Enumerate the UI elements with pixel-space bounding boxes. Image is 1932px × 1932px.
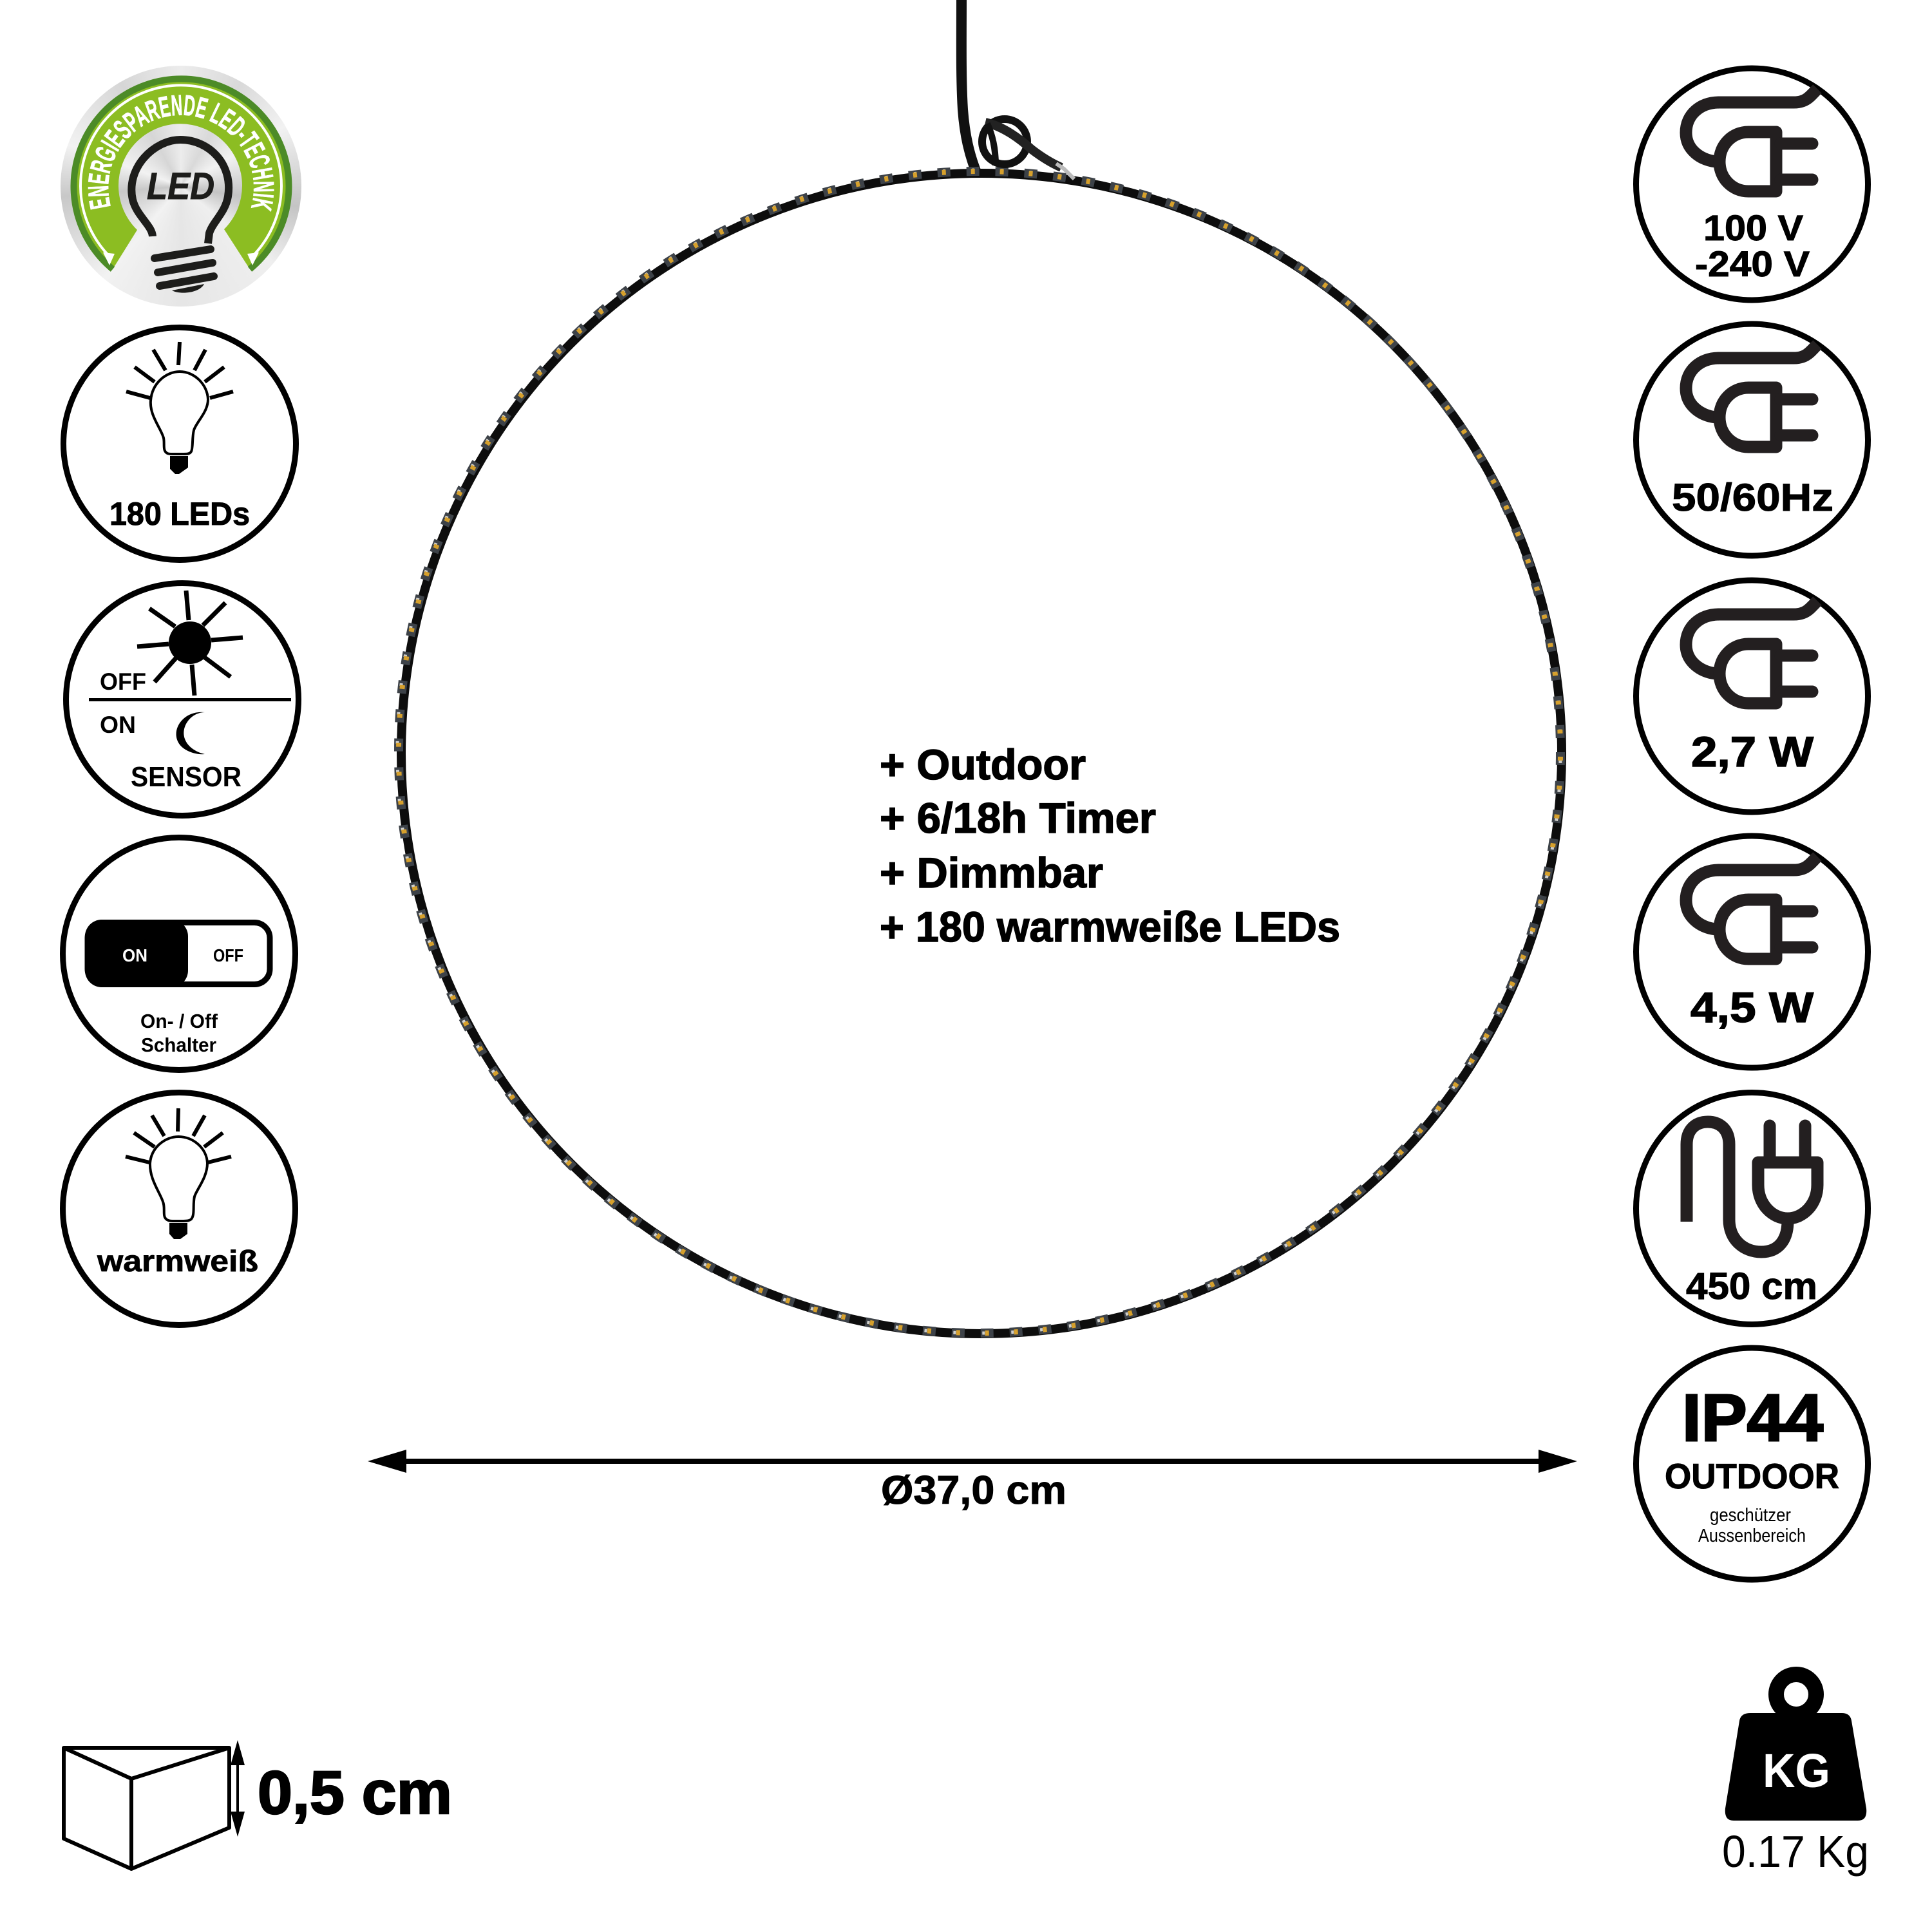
dark green rim [73, 79, 289, 269]
icon: on/off switch [63, 837, 295, 1070]
Aussenbereich: Aussenbereich [1698, 1526, 1806, 1546]
weight label: 0.17 Kg [1722, 1826, 1869, 1877]
cable tail tip [1056, 164, 1074, 179]
weight ring [1776, 1674, 1816, 1714]
product: LED ring [397, 0, 1562, 1334]
bulb tip [172, 284, 204, 293]
bulb rays [126, 1108, 231, 1162]
height arrow [231, 1740, 245, 1837]
icon: warm white [63, 1092, 295, 1325]
icon: frequency [1636, 324, 1868, 556]
label line 2: -240 V [1695, 243, 1810, 284]
icon: 180 LEDs [63, 327, 296, 560]
icon: depth box [64, 1740, 452, 1869]
LED yellow chips [399, 171, 1560, 1333]
bulb [150, 1137, 207, 1221]
OFF label: OFF [100, 668, 146, 695]
icon: weight [1722, 1674, 1869, 1877]
OUTDOOR: OUTDOOR [1665, 1456, 1839, 1496]
icon: 2,7 W [1636, 580, 1868, 812]
plug [1686, 89, 1817, 191]
LED: LED [147, 166, 214, 207]
feature list [880, 741, 1340, 951]
moon [176, 712, 205, 754]
switch knob [85, 920, 188, 987]
feature list: + 180 warmweiße LEDs [880, 903, 1340, 951]
SENSOR label: SENSOR [131, 761, 242, 793]
label: 180 LEDs [109, 496, 250, 532]
ON: ON [122, 945, 147, 965]
cable tail [985, 122, 1061, 167]
arc caption: ENERGIESPARENDE LED-TECHNIK [88, 95, 274, 212]
badge bulb [131, 140, 229, 243]
icon: sensor [66, 583, 299, 815]
sun [169, 621, 211, 664]
plug [1686, 857, 1817, 959]
KG: KG [1763, 1744, 1830, 1797]
green arc band [73, 79, 289, 269]
icon: voltage [1636, 68, 1868, 300]
plug [1686, 601, 1817, 703]
bulb cap [170, 456, 188, 474]
diameter label: Ø37,0 cm [881, 1468, 1066, 1513]
feature list: + Dimmbar [880, 849, 1103, 896]
geschützer: geschützer [1710, 1505, 1791, 1526]
sun rays [137, 591, 243, 696]
feature list: + Outdoor [880, 741, 1086, 788]
hanging cable [961, 0, 977, 174]
depth label: 0,5 cm [258, 1759, 452, 1827]
label: warmweiß [97, 1244, 258, 1278]
bulb cap [169, 1223, 187, 1239]
icon: cable length [1636, 1092, 1868, 1324]
weight body [1725, 1713, 1866, 1821]
label: 4,5 W [1690, 983, 1814, 1031]
caption line 2: Schalter [141, 1034, 216, 1056]
box [64, 1748, 229, 1869]
white arc line [80, 85, 281, 258]
plug [1686, 345, 1817, 447]
caption: On- / Off [140, 1010, 218, 1032]
arrow: diameter [368, 1450, 1577, 1473]
switch frame [88, 922, 270, 984]
bulb [151, 372, 208, 454]
hanging loop [982, 119, 1027, 164]
IP44: IP44 [1682, 1381, 1823, 1455]
divider [89, 698, 291, 701]
ON label: ON [100, 712, 136, 738]
label: 2,7 W [1691, 728, 1814, 775]
label: 100 V [1703, 207, 1803, 248]
badge: energy saving LED [61, 66, 301, 307]
feature list: + 6/18h Timer [880, 794, 1156, 842]
icon: IP44 outdoor [1636, 1348, 1868, 1580]
LED bodies [399, 171, 1560, 1333]
LED highlights [397, 170, 1560, 1333]
cable and plug [1687, 1122, 1817, 1252]
OFF: OFF [213, 945, 243, 965]
arc caption path [108, 115, 254, 207]
knot [987, 124, 996, 166]
arc arrowheads [103, 252, 259, 265]
label: 450 cm [1686, 1265, 1817, 1307]
bulb thread [155, 249, 214, 286]
bulb rays [126, 342, 233, 398]
label: 50/60Hz [1672, 476, 1833, 519]
metal ring [401, 173, 1562, 1334]
icon: 4,5 W [1636, 836, 1868, 1068]
